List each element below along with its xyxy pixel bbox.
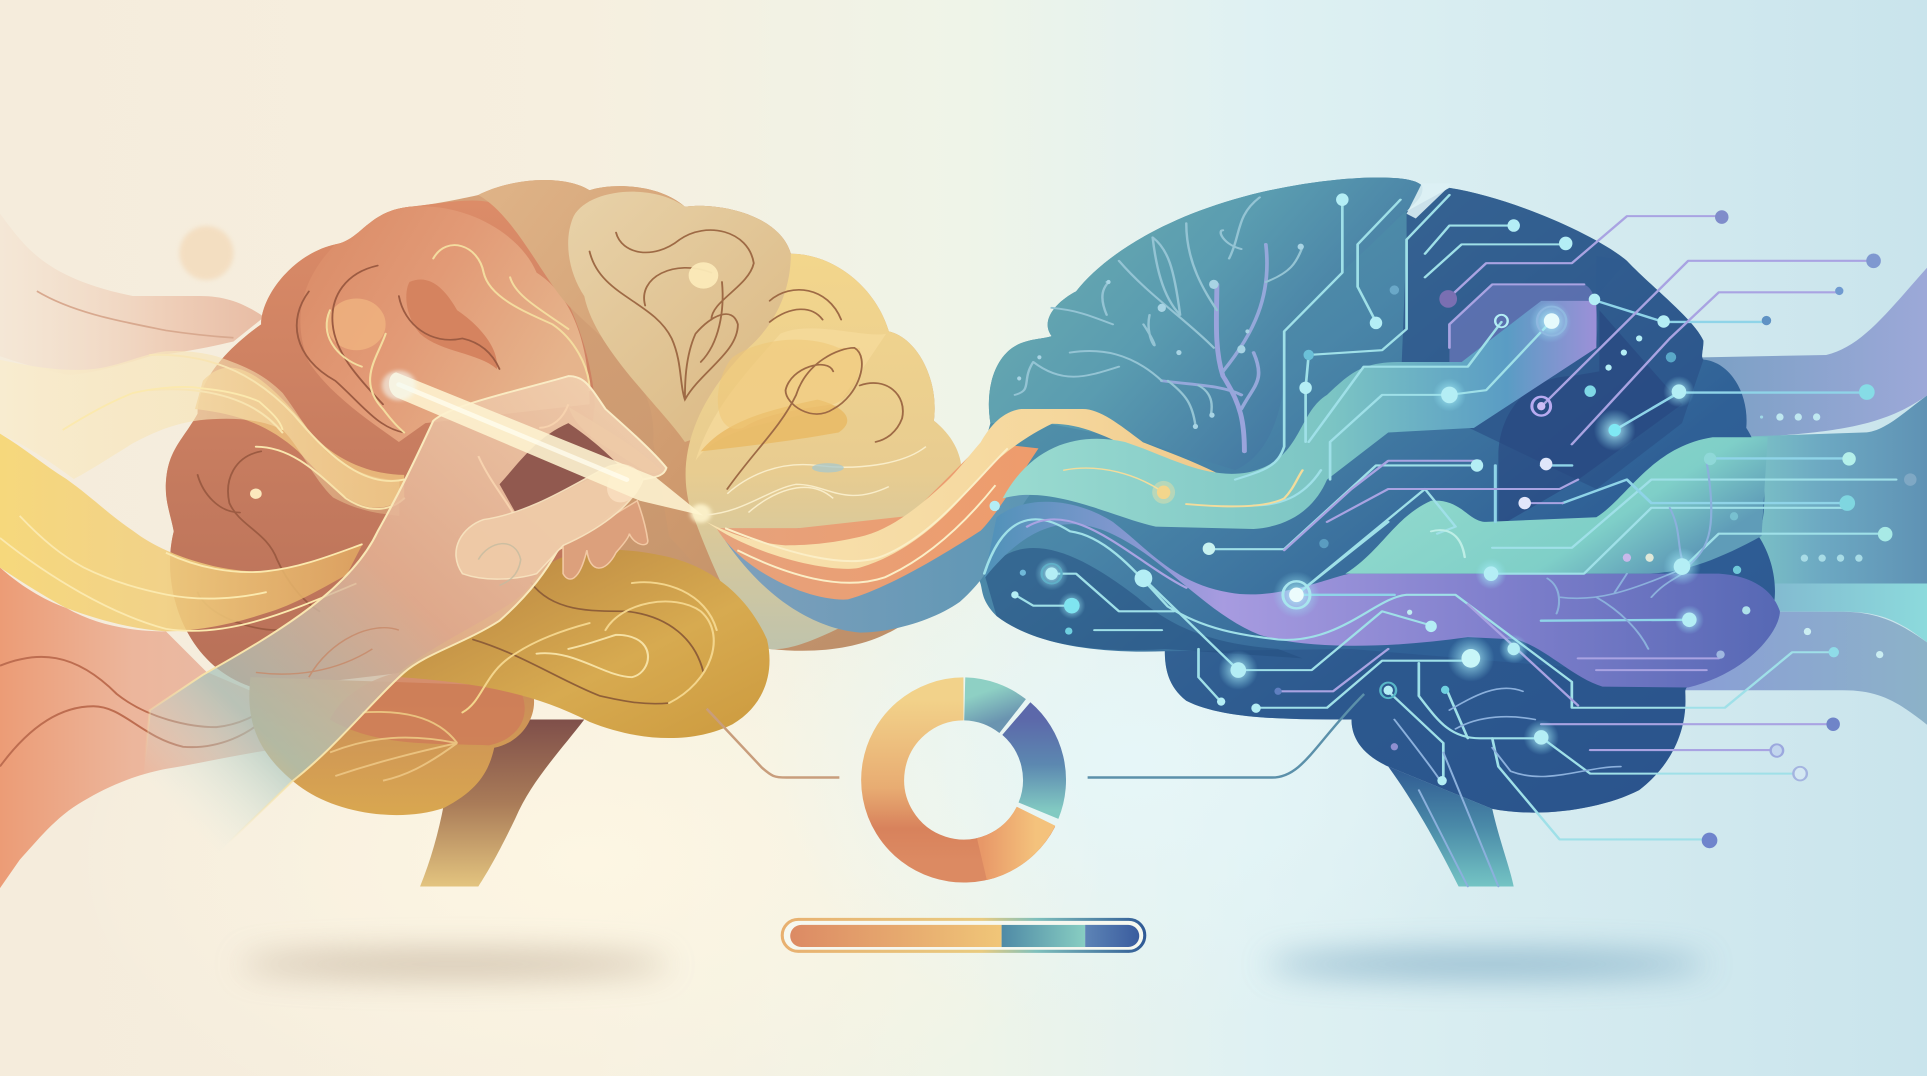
- brain silhouette base: [166, 180, 962, 687]
- connector: right brain to donut: [1088, 694, 1364, 778]
- dark inner panels: [1498, 310, 1682, 527]
- circuit nodes: [989, 193, 1750, 785]
- donut: purple segment: [1016, 719, 1045, 811]
- stream: blue layer: [725, 467, 1032, 633]
- stream: fine lines: [725, 448, 1008, 583]
- hand: inner lines: [478, 404, 568, 513]
- donut: bright orange highlight: [982, 816, 1036, 859]
- stream fine lines: [0, 387, 363, 631]
- lobe: tan upper: [478, 180, 839, 649]
- progress bar: [782, 919, 1145, 951]
- temporal lobe lines: [462, 582, 717, 712]
- left stream: yellow band: [0, 434, 363, 631]
- tan wave over brain: [195, 368, 404, 508]
- lobe: yellow right: [686, 254, 962, 649]
- donut: teal segment: [965, 699, 1013, 716]
- white gap notch: [1407, 183, 1452, 218]
- pen glow top: [382, 370, 416, 401]
- cerebellum veins: [330, 712, 457, 781]
- pen tip strokes: [706, 447, 926, 515]
- node glows: [1035, 301, 1704, 755]
- hand: arm and palm: [139, 376, 666, 903]
- outer terminals: [1702, 210, 1917, 848]
- stream: upper teal: [1003, 301, 1596, 529]
- hand: thumb: [456, 465, 643, 579]
- node: purple dot: [1439, 290, 1457, 308]
- lower lobe: cerebellum: [249, 677, 534, 815]
- silhouette: [972, 177, 1775, 813]
- lobe: golden temporal: [399, 550, 770, 738]
- human creative brain: [150, 180, 962, 887]
- amber node: [1152, 481, 1175, 504]
- stem: [1388, 767, 1514, 887]
- central stream connecting the brains: [707, 409, 1217, 633]
- hand: fingers under pen: [563, 501, 648, 579]
- lower lobe: stem: [420, 720, 584, 887]
- pen body: [389, 372, 703, 516]
- brain sulci lines: [198, 230, 903, 630]
- neural tree: [1015, 197, 1303, 451]
- dots: [250, 489, 262, 499]
- left flowing streams behind brain: [0, 214, 277, 888]
- stream: yellow layer: [707, 409, 1217, 569]
- donut chart: [883, 699, 1045, 861]
- tree nodes: [1017, 244, 1399, 429]
- hand: lower wrist lines: [256, 628, 399, 677]
- AI circuit brain: [707, 177, 1917, 887]
- circuit traces: [984, 195, 1896, 887]
- ring nodes: [1042, 307, 1566, 698]
- lobe: orange inner blob: [406, 279, 497, 369]
- lobe: pale top: [568, 192, 825, 442]
- navy upper right region: [1400, 188, 1703, 489]
- stream: middle teal: [1345, 437, 1768, 574]
- ground shadow: left brain: [240, 952, 670, 977]
- top lobe teal: [989, 177, 1422, 470]
- index finger overlay: [568, 407, 661, 473]
- donut: main orange segment: [883, 699, 1036, 861]
- stream: orange layer: [716, 442, 1038, 600]
- wave fine lines: [150, 355, 404, 509]
- purple panel upper: [1382, 284, 1597, 430]
- pen tip glow: [690, 504, 711, 523]
- navy lower region: [1165, 649, 1686, 813]
- right background streams: [1684, 268, 1927, 725]
- hand: dark grip gap: [500, 423, 619, 513]
- ground shadow: right brain: [1266, 952, 1708, 977]
- lobe: left terracotta: [166, 200, 595, 687]
- hand holding glowing pen: [139, 370, 926, 903]
- decorative circle: [179, 226, 234, 280]
- stream: purple: [984, 502, 1780, 688]
- connector: left brain to donut: [707, 709, 839, 778]
- left stream: cream band: [0, 351, 399, 516]
